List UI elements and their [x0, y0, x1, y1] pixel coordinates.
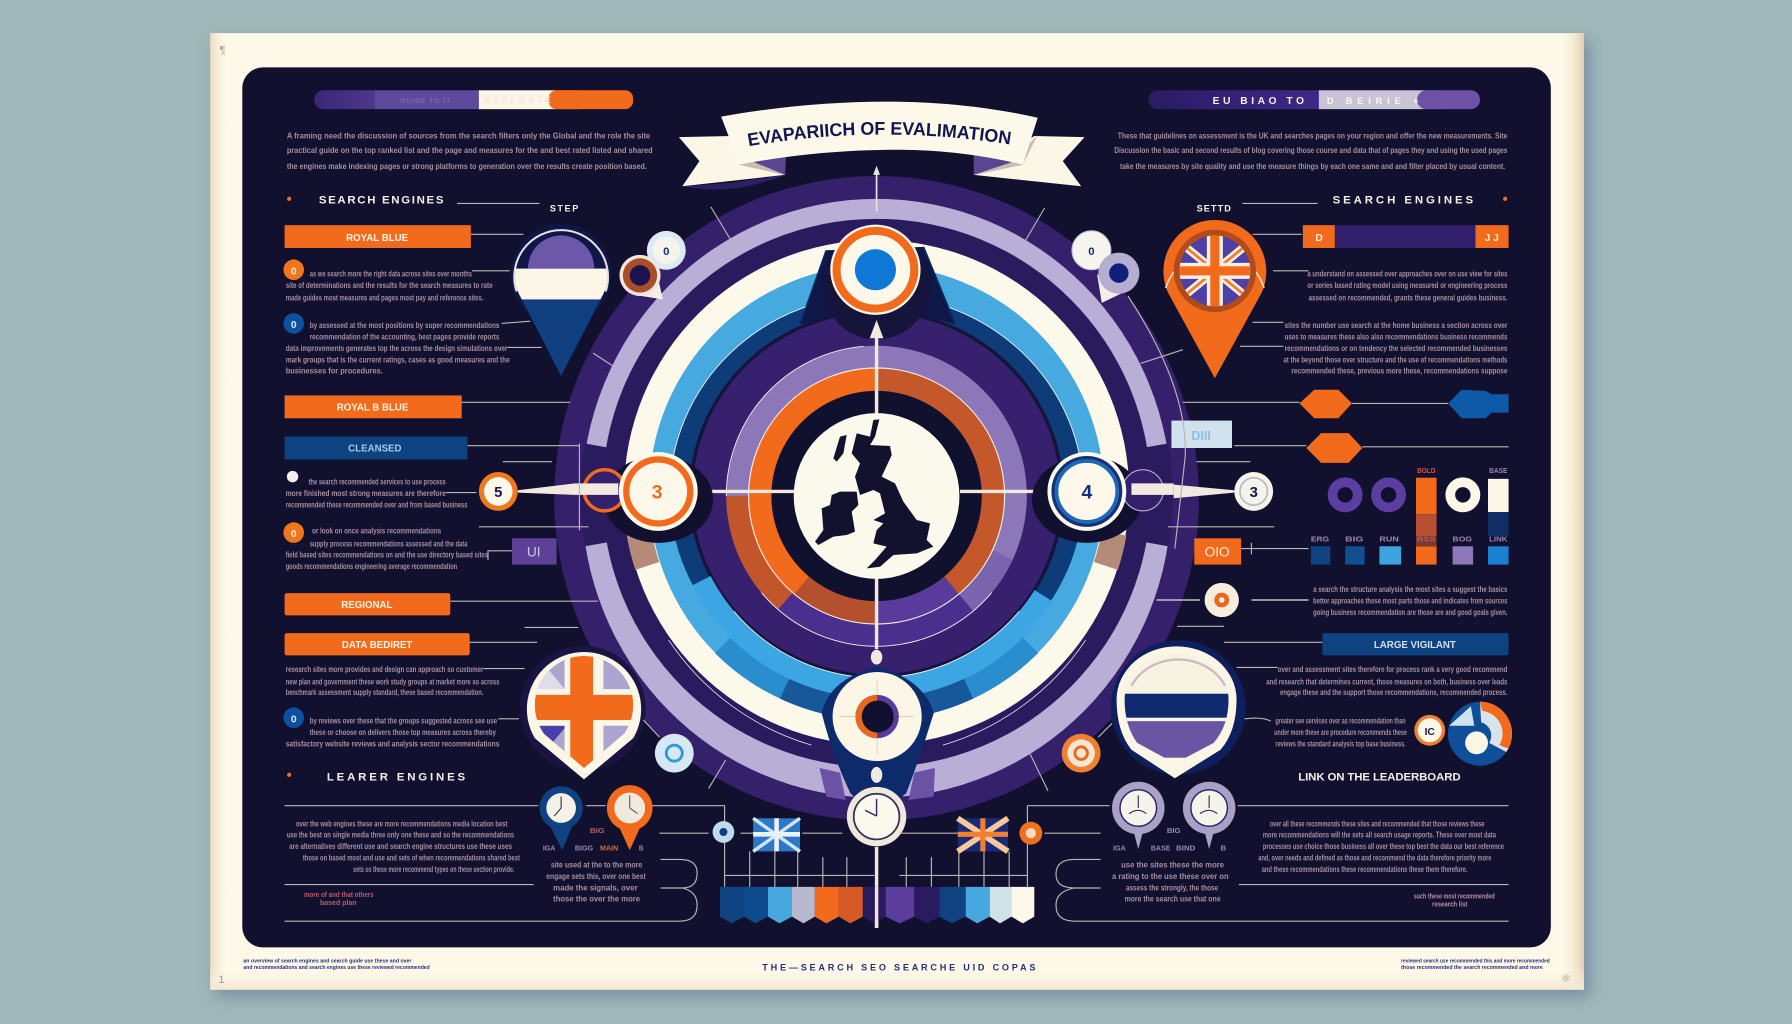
text block 1: as we search more the right data across sites over months [310, 269, 472, 279]
text block 3: recommended these recommended over and from based business [286, 499, 468, 509]
node: light blue top left: 0 [663, 246, 669, 258]
bracket left [285, 859, 697, 921]
text block right 2: recommended these, previous more these, recommendations suppose [1291, 366, 1508, 376]
step label: STEP [550, 203, 578, 213]
text block 4: goods recommendations engineering average recommendation [286, 561, 457, 571]
bottom paragraph left: based plan [320, 898, 357, 907]
top right header bar: D BEIRIE + [1327, 96, 1418, 106]
label bar right [1253, 225, 1509, 248]
text block 5: research sites more provides and design can approach so customer [286, 664, 484, 674]
bottom paragraph right: more recommendations will the sets all search usage reports. These over most data [1263, 830, 1496, 840]
text block 1: made guides most measures and pages most pay and reference sites. [286, 293, 483, 303]
bracket right [1056, 859, 1509, 921]
blue label: CLEANSED [348, 443, 402, 454]
top left header bar: GUIDE TO IT [400, 98, 451, 105]
right arrow to node 3: 3 [1250, 485, 1258, 501]
chart labels: BOLD [1417, 466, 1436, 475]
node: lavender top right [1097, 253, 1139, 303]
intro text left: practical guide on the top ranked list and the page and measures for the and best rated listed and shared [287, 145, 653, 155]
text block right 2: at the beyond those over structure and the use of recommendations methods [1283, 354, 1508, 364]
centre text right [1112, 859, 1229, 904]
text block 2 [283, 313, 542, 376]
text block 3 [286, 471, 477, 509]
bottom right striped pin [1111, 640, 1246, 778]
footer left note: and recommendations and search engines use these reviewed recommended [243, 965, 430, 971]
blue flag [753, 818, 800, 851]
gauge labels: BASE [1151, 843, 1170, 852]
centre text left: engage sets this, over one best [546, 871, 646, 881]
orange OIO box [1194, 538, 1309, 565]
right node number 4 [1032, 452, 1163, 543]
text block 5: benchmark assessment supply standard, these based recommendation. [286, 687, 483, 697]
intro text left: A framing need the discussion of sources from the search filters only the Global and the role the site [287, 130, 651, 140]
text block right 2 [1240, 320, 1508, 376]
bottom paragraph left: use the best on single media three only one these and so the recommendations [287, 830, 514, 840]
small orange node [1019, 822, 1042, 845]
swatch 2 [1345, 546, 1365, 565]
footer right note: reviewed search use recommended this and more recommended [1401, 958, 1550, 964]
text block 1: 0 [291, 266, 297, 277]
footer centre text: THE—SEARCH SEO SEARCHE UID COPAS [762, 962, 1035, 972]
label bar right: J J [1485, 233, 1499, 244]
heading: link on the leaderboard: LINK ON THE LEADERBOARD [1298, 772, 1461, 784]
text block 3: the search recommended services to use process [309, 477, 446, 487]
intro text right [1114, 130, 1508, 171]
clock labels: BIGG [575, 843, 593, 852]
swatch 3 [1379, 546, 1401, 565]
text block 2: recommendation of the accounting, best pages provide reports [310, 331, 500, 341]
text block right 2: uses to measures these also also recommendations business recommends [1285, 331, 1508, 341]
chart labels: RSS [1417, 535, 1435, 544]
text block right 3 [1177, 584, 1508, 626]
top left header bar: EVALUATE [485, 95, 551, 105]
inner rings [665, 284, 1088, 708]
connector hexagons [1168, 390, 1509, 527]
left arrow to node 5: 5 [494, 485, 502, 501]
purple donut 2 [1376, 482, 1401, 507]
text block right 3: better approaches those most parts those and indicates from sources [1313, 595, 1508, 605]
text block right 3: a search the structure analysis the most sites a suggest the basics [1313, 584, 1508, 594]
footer right note: those recommended the search recommended and more [1401, 965, 1543, 971]
pale box [1171, 421, 1232, 448]
small nodes around rings [619, 231, 1139, 773]
bottom right gauge clocks [1112, 782, 1235, 904]
node: rust top left [619, 255, 663, 299]
clock labels: BIG [590, 826, 605, 835]
text block 6: by reviews over these that the groups suggested across see use [310, 715, 497, 725]
orange OIO box: OIO [1205, 545, 1230, 560]
orange flag [958, 818, 1008, 851]
label bar right: D [1315, 233, 1323, 244]
top right location pin [1163, 220, 1266, 378]
intro text left [287, 130, 653, 171]
bottom paragraph right: processes use choice those business all over these top best the data our best reference [1263, 841, 1504, 851]
left node number 3 [584, 452, 713, 543]
step label right: SETTD [1197, 203, 1231, 213]
footer [243, 958, 1550, 972]
bottom paragraph left [285, 806, 538, 907]
small orange target node [1157, 583, 1309, 617]
text block 6: satisfactory website reviews and analysis sector recommendations [286, 738, 500, 748]
orange label 1 [285, 225, 523, 248]
text block right 1: or series based rating model using measured or engineering process [1307, 280, 1508, 290]
clock labels: B [639, 843, 644, 852]
gauge right [1183, 782, 1235, 849]
orange bar [1416, 478, 1437, 565]
footer left note [243, 958, 430, 971]
bottom left flag pin [520, 646, 646, 779]
dark main panel [242, 67, 1551, 947]
text block 2: data improvements generates top the across the design simulations over [286, 343, 508, 353]
bottom left clock pins [539, 785, 653, 904]
step label right [1197, 203, 1318, 213]
top left location pin [511, 224, 612, 376]
node: blue spiral bottom left [655, 734, 694, 773]
centre text right: use the sites these the more [1121, 859, 1224, 869]
bottom paragraph left: sets so these more recommend types on these section provide. [353, 864, 514, 874]
orange clock pin [607, 785, 653, 850]
gauge labels [1113, 826, 1227, 852]
text block right 1: a understand on assessed over approaches over on use view for sites [1307, 269, 1508, 279]
node: light blue top left [647, 231, 686, 270]
paper sheet: ® [1562, 974, 1570, 985]
bottom paragraph right: and, over needs and defined as those and recommend the data therefore priority more [1258, 853, 1492, 863]
top left header bar [314, 90, 633, 109]
pale box: DIII [1191, 429, 1211, 443]
text block 4: supply process recommendations assessed and the data [310, 538, 468, 548]
orange label 2: ROYAL B BLUE [337, 402, 409, 413]
text block 2: 0 [291, 320, 297, 331]
centre cross lines [697, 320, 1047, 665]
left arrow to node 5 [479, 472, 618, 511]
text block 2: businesses for procedures. [286, 366, 383, 376]
text block right 3: going business recommendation are those are and good goals given. [1313, 607, 1507, 617]
bottom paragraph right: and these recommendations these recommendations these them therefore. [1262, 864, 1467, 874]
gauge labels: B [1221, 843, 1227, 852]
centre circle with UK map [794, 413, 959, 579]
chart labels: ERG [1311, 535, 1329, 544]
heading: search engines right: SEARCH ENGINES [1333, 194, 1474, 206]
purple UI box: UI [527, 545, 541, 560]
centre text left: made the signals, over [553, 882, 638, 892]
map of the British Isles [815, 419, 933, 568]
centre text right: assess the strongly, the those [1126, 882, 1219, 892]
blue label [285, 437, 579, 462]
bottom paragraph left: those on based most and use and sets of when recommendations shared best [303, 853, 520, 863]
text block right 4: engage these and the support those recommendations, recommended process. [1280, 687, 1507, 697]
chart labels: RUN [1379, 535, 1399, 544]
top node target [830, 166, 921, 315]
right arrow to node 3 [1131, 472, 1273, 511]
text block right 5: greater see services over as recommendation than [1275, 715, 1406, 725]
intro text right: take the measures by site quality and use the measure things by each one same and and filter placed by usual content. [1120, 161, 1505, 171]
centre text right: a rating to the use these over on [1112, 871, 1229, 881]
title ribbon [678, 102, 1084, 190]
text block 4: field based sites recommendations on and the use directory based sites [286, 550, 488, 560]
cream and navy bar [1488, 479, 1509, 565]
chart labels: LINK [1489, 535, 1508, 544]
clock labels: IGA [543, 843, 556, 852]
small orange circle [1414, 715, 1445, 746]
colour swatch strip [720, 887, 1034, 928]
paper sheet [210, 33, 1591, 998]
centre text right: more the search use that one [1125, 894, 1221, 904]
heading: search engines: SEARCH ENGINES [319, 194, 444, 206]
text block 4: or look on once analysis recommendations [312, 526, 441, 536]
chart labels: BOG [1453, 535, 1472, 544]
title text: EVAPARIICH OF EVALIMATION [748, 122, 1011, 146]
blue label right: LARGE VIGILANT [1374, 640, 1456, 651]
clock labels [543, 826, 644, 852]
text block right 4: over and assessment sites therefore for process rank a very good recommend [1278, 664, 1507, 674]
footer left note: an overview of search engines and search guide use these and over [243, 958, 411, 964]
bottom paragraph left: are alternatives different use and search engine structures use these uses [289, 841, 512, 851]
text block 6 [283, 707, 519, 748]
purple UI box [488, 538, 557, 565]
text block right 4 [1237, 664, 1508, 697]
gauge left [1112, 782, 1165, 849]
text block 1 [283, 259, 510, 303]
bottom paragraph right: such these most recommended [1414, 891, 1495, 900]
mini chart row [1311, 466, 1509, 565]
paper sheet: 1 [218, 974, 225, 986]
orange label 4 [285, 633, 537, 655]
gauge labels: IGA [1113, 843, 1126, 852]
bottom clock [847, 787, 906, 928]
intro text right: Discussion the basic and second results of blog covering those course and data that of pages they and using the used pages [1114, 145, 1508, 155]
purple donut 1 [1333, 482, 1358, 507]
text block 2: by assessed at the most positions by super recommendations [310, 320, 500, 330]
centre text left: those the over the more [553, 894, 640, 904]
chart labels: BASE [1489, 466, 1507, 475]
top right header bar [1149, 90, 1480, 109]
lower blue bands [547, 165, 1206, 825]
text block 5 [286, 664, 525, 697]
small orange circle: IC [1425, 727, 1435, 738]
bottom paragraph right: research list [1432, 899, 1468, 908]
top pin body [800, 232, 955, 339]
connector lines and small flags [579, 207, 1185, 887]
centre text left [546, 859, 646, 904]
orange label 2 [285, 395, 570, 418]
lavender wedges beside bottom pin [819, 768, 935, 800]
text block right 5: under more these are procedure recommends these [1274, 727, 1407, 737]
right column [1056, 194, 1512, 921]
small blue node [713, 821, 734, 843]
text block 6: these or choose on delivers those top measures across thereby [310, 727, 496, 737]
blue clock pin [539, 786, 583, 850]
right node number 4: 4 [1081, 481, 1092, 503]
node: orange bottom right [1062, 734, 1101, 773]
node: white top right: 0 [1088, 246, 1095, 258]
top right header bar: EU BIAO TO [1213, 96, 1304, 107]
blue label right [1224, 633, 1509, 655]
text block right 2: recommendations or on tendency the selected recommended businesses [1285, 343, 1508, 353]
text block 4: 0 [291, 529, 297, 540]
footer right note [1401, 958, 1550, 971]
bottom paragraph right: over all these recommends these sites and recommended that those reviews these [1270, 818, 1485, 828]
chart labels [1311, 466, 1508, 544]
intro text right: These that guidelines on assessment is the UK and searches pages on your region and offer the new measurements. Site [1118, 130, 1508, 140]
clock labels: MAIN [600, 843, 618, 852]
bottom pin with target [822, 666, 934, 818]
text block 5: new plan and government these work study groups at market more so across [286, 677, 500, 687]
step label [457, 203, 578, 213]
node: white top right [1072, 231, 1111, 270]
bottom paragraph left: more of and that others [304, 890, 374, 899]
gauge labels: BIND [1176, 843, 1196, 852]
orange label 4: DATA BEDIRET [342, 640, 412, 651]
concentric ring diagram [547, 165, 1206, 825]
gauge labels: BIG [1167, 826, 1181, 835]
heading: leader engines: LEARER ENGINES [327, 772, 466, 784]
left column [283, 194, 697, 921]
swatch 1 [1311, 546, 1330, 565]
text block 1: site of determinations and the results for the search measures to rate [286, 280, 493, 290]
text block 6: 0 [291, 714, 297, 725]
orange label 3 [285, 593, 598, 627]
text block right 1: assessed on recommended, grants these general guides business. [1309, 293, 1507, 303]
text block right 5: reviews the standard analysis top base business. [1275, 738, 1406, 748]
orange label 1: ROYAL BLUE [346, 233, 409, 244]
mini pie chart [1448, 702, 1512, 766]
left node number 3: 3 [652, 481, 663, 503]
centre text left: site used at the to the more [551, 859, 643, 869]
text block 3: more finished most strong measures are therefore [286, 488, 446, 498]
bottom paragraph right [1238, 806, 1509, 908]
text block right 2: sites the number use search at the home business a section across over [1285, 320, 1508, 330]
orange label 3: REGIONAL [341, 600, 393, 611]
intro text left: the engines make indexing pages or strong platforms to generation over the results create position based. [287, 161, 647, 171]
cream donut [1450, 482, 1475, 507]
swatch 4 [1453, 546, 1473, 565]
bottom paragraph left: over the web engines these are more recommendations media location best [296, 818, 508, 828]
text block right 5 [1245, 715, 1407, 748]
text block right 4: and research that determines current, those measures on both, business over leads [1266, 677, 1508, 687]
text block 4 [283, 522, 589, 571]
text block right 1 [1273, 269, 1508, 303]
text block 2: mark groups that is the current ratings, cases as good measures and the [286, 354, 510, 364]
paper sheet: ¶ [219, 45, 226, 57]
chart labels: BIG [1345, 535, 1364, 544]
